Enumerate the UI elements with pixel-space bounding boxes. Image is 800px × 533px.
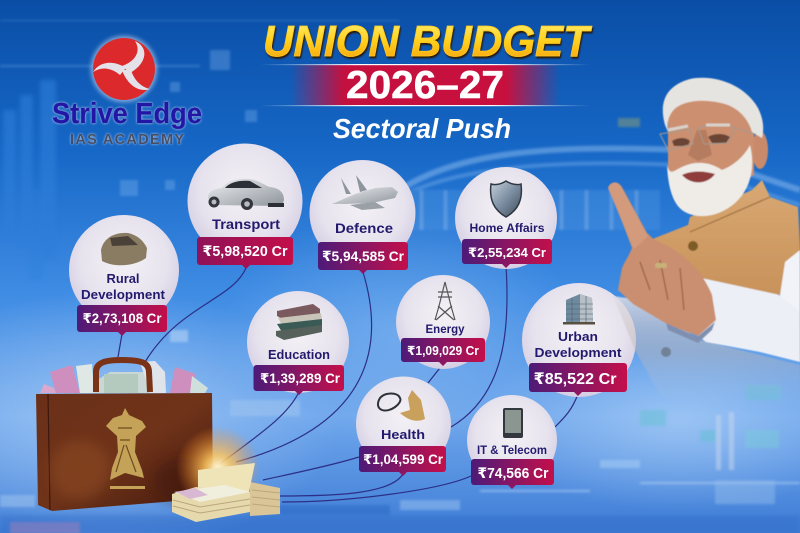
icon: building: [563, 294, 595, 324]
glasses: [660, 125, 755, 150]
logo: Strive Edge IAS Academy: [52, 36, 202, 148]
icon: rural vehicle: [101, 233, 147, 265]
label line two: Development: [81, 287, 166, 302]
vest button: [688, 241, 698, 251]
white beard: [667, 145, 752, 216]
label: IT & Telecom: [477, 445, 547, 457]
logo tagline: IAS ACADEMY: [70, 132, 184, 148]
panel: Home Affairs: [455, 167, 557, 269]
icon: shield: [491, 181, 521, 217]
icon: car: [208, 179, 284, 210]
label: Transport: [212, 217, 281, 232]
illustration: budget briefcase: [36, 360, 260, 511]
label: Health: [381, 427, 425, 442]
subtitle: Sectoral Push: [333, 113, 511, 144]
value badge: ₹1,09,029 Cr: [407, 344, 479, 358]
panel: Education: [247, 291, 349, 395]
value badge: ₹85,522 Cr: [534, 371, 616, 388]
label: Home Affairs: [470, 223, 544, 235]
briefcase body: [36, 393, 213, 511]
panel: Energy: [396, 275, 490, 369]
value badge: ₹2,55,234 Cr: [468, 245, 546, 260]
parliament building backdrop: [400, 148, 800, 230]
photo: Prime Minister pointing: [608, 78, 800, 410]
national emblem: [106, 408, 146, 489]
label: Energy: [426, 324, 465, 336]
briefcase handle: [96, 360, 150, 392]
connector lines: [118, 266, 578, 502]
white sleeve: [690, 276, 800, 362]
icon: transmission tower: [435, 282, 455, 320]
value badge: ₹5,98,520 Cr: [202, 244, 288, 260]
collar seam: [690, 197, 770, 232]
pointing hand: [608, 182, 716, 336]
label: Urban: [558, 329, 598, 344]
kurta body fading out: [613, 296, 800, 410]
panel: Defence: [310, 160, 416, 274]
label: Rural: [106, 271, 140, 286]
panel: IT & Telecom: [467, 395, 557, 489]
sleeve lining: [666, 322, 715, 343]
year band: [260, 64, 590, 107]
icon: stethoscope: [378, 390, 425, 421]
shirt button: [661, 347, 671, 357]
sand vest: [640, 180, 800, 295]
value badge: ₹2,73,108 Cr: [82, 311, 162, 326]
title: Union Budget: UNION BUDGET: [263, 17, 592, 66]
panel: Health: [356, 376, 451, 476]
panel: Urban Development: [522, 283, 636, 397]
eyes: [672, 134, 730, 146]
ear: [752, 131, 768, 169]
panel: Rural Development: [69, 215, 179, 336]
nose: [688, 130, 712, 161]
icon: fighter jet: [332, 175, 398, 210]
white hair: [663, 78, 763, 138]
icon: books: [276, 304, 322, 340]
value badge: ₹74,566 Cr: [478, 466, 549, 482]
label: Education: [268, 348, 330, 362]
label: Defence: [335, 221, 394, 236]
glow: [176, 426, 260, 510]
mouth: [682, 172, 715, 182]
value badge: ₹1,39,289 Cr: [260, 371, 341, 386]
value badge: ₹5,94,585 Cr: [322, 248, 405, 264]
eyebrows: [668, 125, 730, 130]
panel: Transport: [188, 144, 302, 269]
year band: 2026–27: [346, 64, 504, 107]
icon: smartphone: [503, 408, 523, 438]
banknotes: [40, 361, 208, 393]
illustration: cash stack: [172, 463, 280, 522]
white shoulder: [780, 250, 800, 312]
logo emblem: [91, 36, 157, 102]
value badge: ₹1,04,599 Cr: [363, 452, 444, 467]
logo wordmark: Strive Edge: [52, 98, 202, 130]
right lower city: [480, 385, 800, 504]
face: [668, 94, 754, 205]
title block: [260, 17, 592, 144]
label line two: Development: [534, 345, 622, 360]
